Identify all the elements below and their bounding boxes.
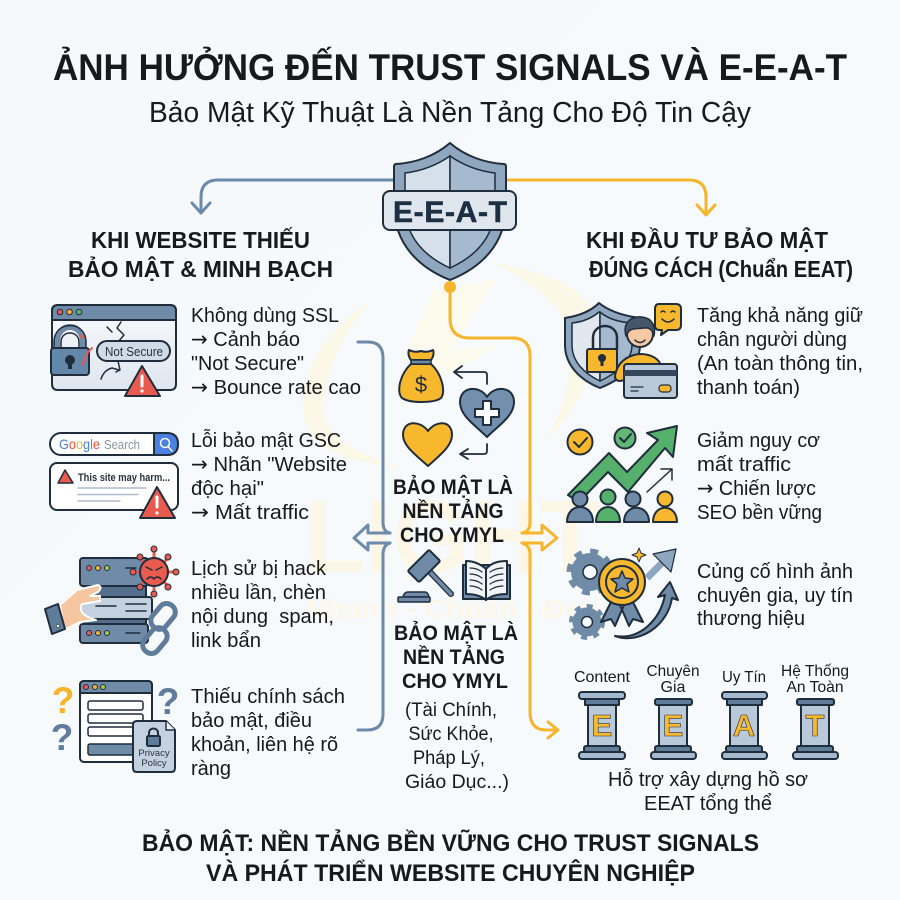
text: reduced traffic risk: Giảm nguy cơ xyxy=(697,429,820,452)
watermark logo: Nhanh - Chuẩn - Đẹp xyxy=(305,594,600,624)
text: YMYL heading one: BẢO MẬT LÀ xyxy=(393,475,513,499)
arrow: shield to right column xyxy=(506,180,715,215)
pillar: Content xyxy=(574,669,631,759)
icon: money bag xyxy=(399,350,443,402)
text: no SSL: → Cảnh báo xyxy=(191,327,300,351)
text: missing privacy policy: ràng xyxy=(191,757,231,780)
arrow: central yellow connector with hollow arrow xyxy=(444,281,558,738)
text: no SSL xyxy=(191,304,361,399)
text: YMYL heading one: CHO YMYL xyxy=(400,524,504,547)
text: user retention: Tăng khả năng giữ xyxy=(697,304,863,327)
icon: open book xyxy=(463,561,510,600)
pillar: Chuyên Gia: Chuyên xyxy=(646,663,700,680)
text: brand reputation: thương hiệu xyxy=(697,607,805,630)
heading: right column xyxy=(586,225,853,282)
watermark logo xyxy=(303,262,600,624)
text: YMYL fields: Pháp Lý, xyxy=(413,748,485,769)
heading: left column xyxy=(68,226,333,282)
text: reduced traffic risk: mất traffic xyxy=(697,453,791,476)
icon: E-E-A-T shield: E-E-A-T xyxy=(393,196,507,229)
icon: hacked server xyxy=(45,546,179,657)
text: GSC security error: → Mất traffic xyxy=(191,500,309,524)
watermark logo: LIGHT xyxy=(305,479,600,594)
text: missing privacy policy: bảo mật, điều xyxy=(191,709,312,732)
text: YMYL fields: Giáo Dục...) xyxy=(405,772,509,793)
text: GSC security error: độc hại" xyxy=(191,477,264,500)
pillar: Chuyên Gia: E xyxy=(663,708,683,743)
pillar: Hệ Thống An Toàn xyxy=(781,663,849,759)
heading: right column: ĐÚNG CÁCH (Chuẩn EEAT) xyxy=(589,255,853,282)
text: YMYL fields: Sức Khỏe, xyxy=(408,724,494,745)
text: YMYL heading two: CHO YMYL xyxy=(402,670,508,693)
text: reduced traffic risk xyxy=(697,429,822,524)
heading: left column: KHI WEBSITE THIẾU xyxy=(91,226,310,253)
footer statement: BẢO MẬT: NỀN TẢNG BỀN VỮNG CHO TRUST SIGNALS xyxy=(142,828,759,857)
text: no SSL: → Bounce rate cao xyxy=(191,375,361,399)
text: reduced traffic risk: → Chiến lược xyxy=(697,476,816,500)
text: hack history: nhiều lần, chèn xyxy=(191,581,326,604)
text: brand reputation: chuyên gia, uy tín xyxy=(697,584,853,607)
pillar: Chuyên Gia: Gia xyxy=(661,679,686,696)
footer statement xyxy=(142,828,759,887)
text: EEAT profile caption xyxy=(608,768,808,815)
text: user retention: thanh toán) xyxy=(697,376,800,399)
icon: shield user with payment card xyxy=(565,303,681,398)
text: user retention: chân người dùng xyxy=(697,328,847,351)
text: no SSL: Không dùng SSL xyxy=(191,304,339,327)
heading: left column: BẢO MẬT & MINH BẠCH xyxy=(68,254,333,282)
icon: Google search warning: Google xyxy=(59,436,100,452)
icon: E-E-A-T shield xyxy=(383,143,516,280)
icon: privacy policy page xyxy=(51,680,179,772)
icon: growth arrow and people xyxy=(567,426,677,522)
pillar: Hệ Thống An Toàn: Hệ Thống xyxy=(781,663,849,680)
icon: privacy policy page: Privacy xyxy=(138,748,170,759)
text: brand reputation: Củng cố hình ảnh xyxy=(697,560,853,583)
text: missing privacy policy xyxy=(191,685,345,780)
text: reduced traffic risk: SEO bền vững xyxy=(697,501,822,524)
arrow: blue bracket with hollow arrow xyxy=(354,342,390,730)
icon: not secure browser xyxy=(51,305,176,396)
icon: privacy policy page: ? xyxy=(52,680,74,721)
pillar: Uy Tín: Uy Tín xyxy=(722,669,766,686)
text: YMYL heading one xyxy=(393,475,513,547)
text: EEAT profile caption: EEAT tổng thể xyxy=(644,792,772,815)
footer statement: VÀ PHÁT TRIỂN WEBSITE CHUYÊN NGHIỆP xyxy=(206,859,695,887)
arrow: shield to left column xyxy=(192,180,394,213)
icon: Google search warning xyxy=(50,433,178,518)
icon: yellow heart xyxy=(403,423,452,466)
text: user retention: (An toàn thông tin, xyxy=(697,352,863,375)
pillar: Chuyên Gia xyxy=(646,663,700,759)
icon: money bag: $ xyxy=(415,372,427,397)
text: YMYL fields xyxy=(405,700,509,793)
text: hack history: Lịch sử bị hack xyxy=(191,557,327,580)
icon: not secure browser: Not Secure xyxy=(105,345,163,359)
text: GSC security error xyxy=(191,429,347,524)
icon: privacy policy page: Policy xyxy=(141,758,167,769)
icon: Google search warning: Search xyxy=(104,438,140,452)
text: missing privacy policy: khoản, liên hệ rõ xyxy=(191,733,338,756)
heading: right column: KHI ĐẦU TƯ BẢO MẬT xyxy=(586,225,828,253)
text: YMYL fields: (Tài Chính, xyxy=(405,700,497,721)
text: YMYL heading two: NỀN TẢNG xyxy=(403,646,505,669)
icon: slate heart with cross xyxy=(460,389,514,437)
icon: gavel xyxy=(398,550,451,602)
pillar: Content: E xyxy=(592,708,612,743)
pillar: Hệ Thống An Toàn: An Toàn xyxy=(786,679,844,696)
pillar: Uy Tín xyxy=(722,669,767,759)
text: missing privacy policy: Thiếu chính sách xyxy=(191,685,345,708)
text: GSC security error: Lỗi bảo mật GSC xyxy=(191,429,341,452)
text: GSC security error: → Nhãn "Website xyxy=(191,452,347,476)
icon: gears and award medal xyxy=(569,548,678,638)
text: user retention xyxy=(697,304,863,399)
text: hack history: nội dung spam, xyxy=(191,605,334,628)
icon: privacy policy page: ? xyxy=(157,681,179,722)
pillar: Uy Tín: A xyxy=(733,708,755,743)
text: no SSL: "Not Secure" xyxy=(191,352,304,375)
text: YMYL heading one: NỀN TẢNG xyxy=(402,500,504,523)
pillar: Content: Content xyxy=(574,669,631,686)
icon: Google search warning: This site may harm... xyxy=(78,472,170,484)
text: EEAT profile caption: Hỗ trợ xây dựng hồ sơ xyxy=(608,768,808,791)
text: YMYL heading two: BẢO MẬT LÀ xyxy=(394,621,518,645)
text: hack history xyxy=(191,557,334,652)
subtitle: Bảo Mật Kỹ Thuật Là Nền Tảng Cho Độ Tin Cậy xyxy=(149,97,751,129)
arrows: heart cycle xyxy=(454,366,487,459)
text: YMYL heading two xyxy=(394,621,518,693)
icon: privacy policy page: ? xyxy=(51,717,73,758)
pillar: Hệ Thống An Toàn: T xyxy=(806,708,825,743)
text: brand reputation xyxy=(697,560,853,630)
text: hack history: link bẩn xyxy=(191,629,261,652)
title: ẢNH HƯỞNG ĐẾN TRUST SIGNALS VÀ E-E-A-T xyxy=(53,46,847,88)
